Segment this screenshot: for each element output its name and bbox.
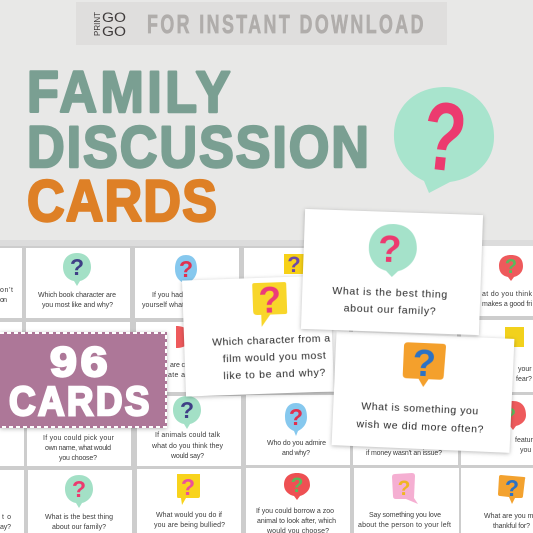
card text: like to be and why? <box>223 367 326 382</box>
card text: zoo animal: animal to look after, which <box>257 518 336 525</box>
card text: book character: Which book character are <box>38 292 116 299</box>
card text: zoo animal: If you could borrow a zoo <box>256 508 334 515</box>
bubble: yellow purple row 1: ? <box>287 252 301 277</box>
card: mint bubble, best thing about family <box>301 209 483 335</box>
card text: best thing: What is the best thing <box>45 514 113 521</box>
card text: best thing <box>45 514 113 531</box>
bubble: yellow row 2 <box>505 327 524 347</box>
card text: love about person: Say something you love <box>369 512 441 519</box>
bubble: red green row 3 <box>500 401 526 430</box>
card text <box>212 332 332 383</box>
card text: animals could talk: what do you think they <box>151 443 224 450</box>
bubble: yellow purple row 1 <box>284 252 305 277</box>
bubble: blue red row 1 <box>175 255 197 288</box>
bubble: red green row 3: ? <box>504 405 516 427</box>
bubble: pink yellow row 4 <box>392 473 418 504</box>
card text: good friend <box>482 291 532 308</box>
card text: book character <box>38 292 116 309</box>
bubble: yellow pink row 4 <box>177 474 200 505</box>
card text: who do you admire: and why? <box>282 450 310 457</box>
bubble: pink yellow row 4: ? <box>398 477 410 500</box>
bubble: mint pink row 4: ? <box>72 476 86 502</box>
card text: feature <box>515 437 533 454</box>
card text: thankful <box>484 513 533 530</box>
bubble: red green row 4 <box>284 473 310 500</box>
card text: money: if money wasn't an issue? <box>366 450 442 457</box>
icon: large mint speech bubble with question mark <box>394 80 494 193</box>
card text: love about person <box>358 512 451 529</box>
card text: pick your own name: own name, what would <box>45 445 111 452</box>
card text: left column fragments: ay? <box>0 524 11 531</box>
card text: pick your own name: If you could pick your <box>43 435 115 442</box>
icon: mint bubble: ? <box>377 229 402 271</box>
card text: bullied: What would you do if <box>156 512 222 519</box>
card text: who do you admire <box>267 440 326 457</box>
card text: bullied: you are being bullied? <box>154 522 225 529</box>
bubble: blue red row 1: ? <box>179 256 193 282</box>
bubble: orange blue row 4: ? <box>505 475 519 501</box>
card text: about our family? <box>343 302 436 318</box>
card text: good friend: makes a good fri <box>482 301 532 308</box>
bubble: mint pink row 4 <box>65 475 93 508</box>
icon: yellow bubble <box>252 279 288 327</box>
card text: pick your own name <box>43 435 115 462</box>
row 2 cards <box>0 320 533 392</box>
card text: What is something you <box>361 400 479 417</box>
title <box>27 59 369 234</box>
badge label: CARDS <box>9 379 149 424</box>
bubble: blue red row 3: ? <box>289 404 303 430</box>
card text: who do you admire: Who do you admire <box>267 440 326 447</box>
logo: Print Go Go: PRINT <box>93 12 102 36</box>
bubble: orange blue row 4 <box>498 475 525 504</box>
icon: yellow bubble: ? <box>258 279 282 321</box>
title: DISCUSSION <box>27 114 369 180</box>
card text <box>332 285 448 318</box>
bubble: yellow pink row 4: ? <box>181 474 195 500</box>
card text: What is the best thing <box>332 285 448 301</box>
icon: mint bubble <box>368 223 418 278</box>
logo: Print Go Go: GO <box>102 24 126 39</box>
card text: Which character from a <box>212 332 330 349</box>
card text: zoo animal <box>256 508 336 533</box>
card text: bullied <box>154 512 225 529</box>
card text: pick your own name: you choose? <box>59 455 97 462</box>
card text: left column fragments <box>0 287 13 531</box>
card text: row 2 fragments <box>168 362 186 379</box>
logo: Print Go Go <box>93 10 126 39</box>
card text: book character: you most like and why? <box>42 302 113 309</box>
card text: if you had: yourself what <box>142 302 184 309</box>
card text: fear: fear? <box>516 376 532 383</box>
banner text: FOR INSTANT DOWNLOAD <box>147 10 423 39</box>
row 4 cards <box>0 468 533 533</box>
card text: if you had: If you had <box>152 292 183 299</box>
card text: if you had <box>142 292 184 309</box>
card text: thankful: thankful for? <box>493 523 530 530</box>
card text: left column fragments: on <box>0 297 7 304</box>
card text: wish we did more often? <box>355 418 484 436</box>
card text: film would you most <box>223 350 326 365</box>
card text <box>355 400 485 436</box>
card text: row 2 fragments: ate a <box>168 372 185 379</box>
card text: love about person: about the person to your left <box>358 522 451 529</box>
bubble: mint navy row 3: ? <box>180 397 194 423</box>
bubble: mint navy row 1: ? <box>70 254 84 280</box>
card text: left column fragments: on't <box>0 287 13 294</box>
icon: orange bubble: ? <box>412 343 437 386</box>
bubble: red green row 4: ? <box>291 474 303 497</box>
card text: animals could talk: would say? <box>170 453 204 460</box>
title: FAMILY <box>27 59 230 125</box>
bubble: mint navy row 3 <box>173 396 201 429</box>
card text: row 2 fragments: are c <box>170 362 186 369</box>
card text: fear: your <box>518 366 532 373</box>
row 3 cards <box>0 395 533 466</box>
bubble: blue red row 3 <box>285 403 307 436</box>
logo: Print Go Go: GO <box>102 10 126 25</box>
card text: thankful: What are you m <box>484 513 533 520</box>
card text: good friend: at do you think <box>482 291 532 298</box>
card text: animals could talk <box>151 432 224 460</box>
bubble: red row 2 <box>176 326 190 348</box>
purple badge: 96 cards <box>0 332 167 428</box>
card text: left column fragments: to <box>2 514 11 521</box>
title: CARDS <box>27 168 217 234</box>
bubble: red green row 1: ? <box>505 256 517 278</box>
badge number: 96 <box>50 338 107 385</box>
card grid <box>0 246 533 533</box>
icon: orange bubble <box>402 342 446 388</box>
card text: animals could talk: If animals could talk <box>155 432 220 439</box>
card: yellow bubble, film character <box>182 275 334 397</box>
bubble: mint navy row 1 <box>63 253 91 286</box>
top banner <box>76 2 447 45</box>
card: orange bubble, do more often <box>332 331 514 453</box>
row 1 cards <box>0 246 533 318</box>
card text: feature: you <box>520 447 531 454</box>
bubble: red green row 1 <box>499 255 523 281</box>
card text: best thing: about our family? <box>52 524 106 531</box>
icon: large mint speech bubble with question mark: ? <box>418 80 471 193</box>
card text: fear <box>516 366 532 383</box>
